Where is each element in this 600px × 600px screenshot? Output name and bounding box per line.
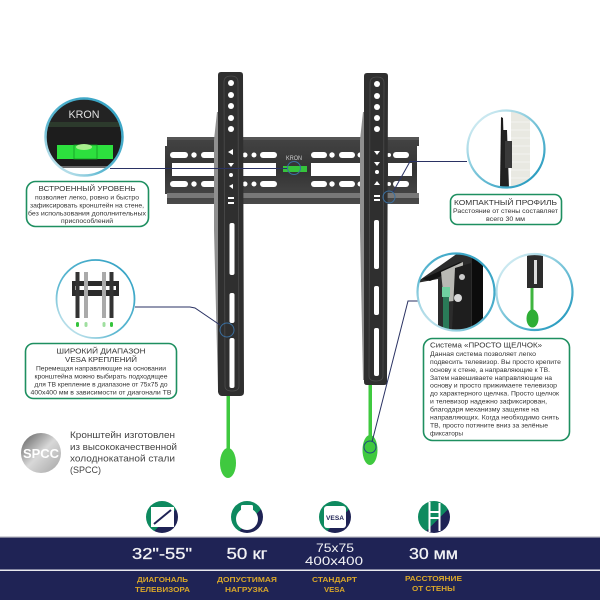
icon: wall distance [418,501,450,533]
right green pull tab [362,385,378,465]
callout: built-in level text: позволяет легко, ровно и быстро [35,196,140,202]
spec: VESA standard: СТАНДАРТ [312,577,358,584]
photo: side view at wall [500,112,530,186]
spec: VESA standard: VESA [324,587,345,594]
panel: compact profile [450,110,562,224]
callout: built-in level text: ВСТРОЕННЫЙ УРОВЕНЬ [38,184,136,193]
callout: easy click text: Затем навешиваете направляющие на [430,375,553,382]
photo: click mechanism [420,254,483,330]
callout: compact profile text: всего 30 мм [486,217,525,223]
text: SPCC description: Кронштейн изготовлен [70,430,175,441]
panel: easy click system [417,253,573,440]
icon: VESA: VESA [326,515,344,522]
spec: wall distance: ОТ СТЕНЫ [412,586,455,593]
right rail [360,73,388,385]
bottom spec band [0,536,600,600]
callout: easy click text: основу к стене, а направляющие к ТВ. [430,367,550,374]
ring [496,254,572,330]
text: SPCC description: (SPCC) [70,465,101,476]
callout: built-in level text: приспособлений [61,218,113,225]
left rail [214,72,244,396]
callout: compact profile text: Расстояние от стены составляет [453,209,558,215]
callout: easy click text: Данная система позволяет легко [430,351,537,358]
left green pull tab [220,396,236,478]
spec: wall distance: 30 мм [409,546,458,563]
callout: easy click text: ТВ, просто потяните вниз за зелёные [430,422,549,430]
icon: TV diagonal [146,501,178,533]
spec: VESA standard [305,541,363,594]
callout: built-in level text: зафиксировать кронштейн на стене, [30,202,144,210]
text: SPCC description: из высококачественной [70,442,177,453]
panel: built-in level [26,98,148,226]
callout: VESA text: VESA КРЕПЛЕНИЙ [65,355,137,364]
ring [46,98,122,176]
callout: VESA text: 400x400 мм в зависимости от диагонали ТВ [30,390,172,396]
callout: easy click text: направляющих. Когда необходимо снять [430,414,560,422]
leader lines [110,162,467,453]
ring [468,110,544,188]
crossbar: KRON [286,156,302,162]
photo: level close-up: KRON [68,109,100,121]
callout: easy click text: фиксаторы [430,430,463,438]
ring [56,260,134,338]
callout: built-in level text [26,182,148,226]
image: mini bracket range [72,272,119,327]
callout: VESA text: Перемещая направляющие на основании [36,366,166,372]
callout: VESA text: для ТВ крепление в диапазоне от 75x75 до [34,382,168,388]
panel: wide VESA range [26,260,176,398]
spec: load: 50 кг [226,546,268,563]
icon: VESA [319,501,351,533]
callout: easy click text: подвесить телевизор. Вы просто крепите [430,359,562,366]
callout: VESA text: кронштейна можно выбирать подходящее [34,374,168,380]
callout: easy click text: и телевизор надежно зафиксирован, [430,398,547,406]
text: SPCC description [70,430,177,476]
spec: load: ДОПУСТИМАЯ [217,577,277,584]
icon: weight [231,501,263,533]
callout: easy click text [424,338,570,440]
spec: screen diagonal [132,546,192,594]
spec: load: НАГРУЗКА [225,587,269,594]
text: SPCC description: холоднокатаной стали [70,454,175,464]
callout: compact profile text: КОМПАКТНЫЙ ПРОФИЛЬ [454,198,557,207]
callout: easy click text: основу и просто прижимаете телевизор [430,382,558,390]
spec: screen diagonal: 32"-55" [132,546,192,563]
spec: VESA standard: 400x400 [305,554,363,568]
icon: SPCC steel badge: SPCC [23,446,60,461]
spec: screen diagonal: ТЕЛЕВИЗОРА [135,587,190,594]
callout: easy click text: Система «ПРОСТО ЩЕЛЧОК» [430,340,542,350]
callout: easy click text: до характерного щелчка. Просто щелчок [430,390,559,398]
panel: SPCC material [21,430,177,476]
photo: green pull tab [526,255,543,328]
spec: wall distance: РАССТОЯНИЕ [405,576,462,583]
ring [418,254,494,330]
crossbar [165,137,419,204]
callout: built-in level text: без использования дополнительных [28,212,146,218]
spec: load [217,546,277,594]
icon: SPCC steel badge [21,433,61,473]
callout: compact profile text [450,194,562,224]
callout: VESA text: ШИРОКИЙ ДИАПАЗОН [56,346,146,356]
spec: screen diagonal: ДИАГОНАЛЬ [137,577,188,584]
callout: VESA text [26,344,176,398]
callout: easy click text: благодаря механизму защелке на [430,406,540,414]
spec: wall distance [405,546,462,593]
spec: VESA standard: 75x75 [316,541,354,555]
wall mount bracket [165,72,419,478]
